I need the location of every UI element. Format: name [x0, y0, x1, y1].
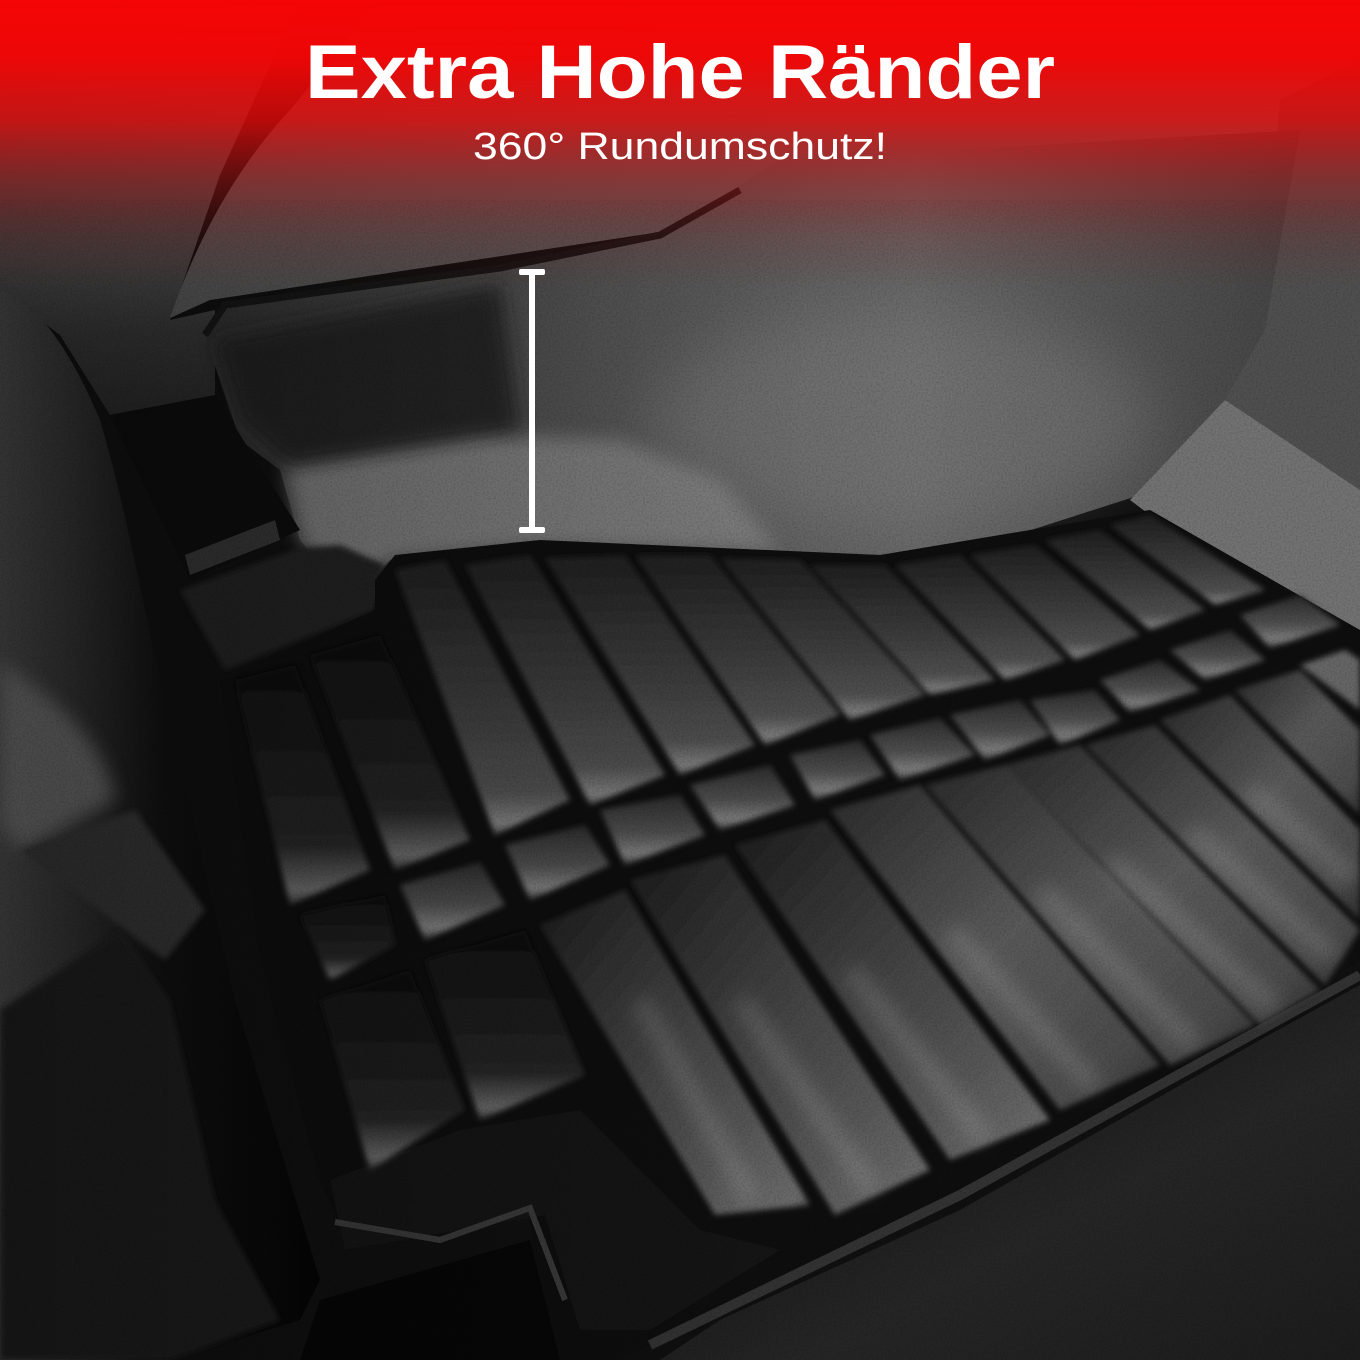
right floor side mat [1130, 400, 1360, 640]
wall lower highlight [285, 435, 780, 590]
floor lower right [660, 985, 1360, 1360]
lower ribs [320, 650, 1360, 1215]
bottom shadow [300, 1240, 560, 1360]
raised mat wall [205, 130, 1300, 600]
right side trim [1225, 60, 1360, 500]
middle small blocks [300, 595, 1340, 980]
rib highlights [640, 790, 1355, 1200]
upper ribs [235, 515, 1265, 905]
seat on the left [0, 290, 320, 1360]
mat floor base [220, 510, 1360, 1360]
icon: height measure bracket [519, 269, 545, 533]
seat rail [185, 520, 280, 575]
wall bright patch [650, 310, 1150, 530]
wall stitched edge [205, 190, 740, 335]
bottom-left mat section [330, 1110, 780, 1330]
stitched edge lower [650, 975, 1360, 1345]
dashboard trim left [0, 0, 300, 415]
door sill panel [170, 0, 1360, 318]
seat strap [20, 810, 205, 960]
seat fold highlight [0, 660, 115, 850]
red top gradient overlay [0, 0, 1360, 290]
title: Extra Hohe Ränder [305, 30, 1055, 115]
seat lower cushion [0, 930, 280, 1360]
seat corner mat [180, 545, 385, 670]
black carpet by seat [110, 395, 300, 580]
wall dark left patch [215, 285, 520, 465]
subtitle: 360° Rundumschutz! [473, 126, 887, 168]
bottom-left mat stitching [335, 1208, 565, 1300]
